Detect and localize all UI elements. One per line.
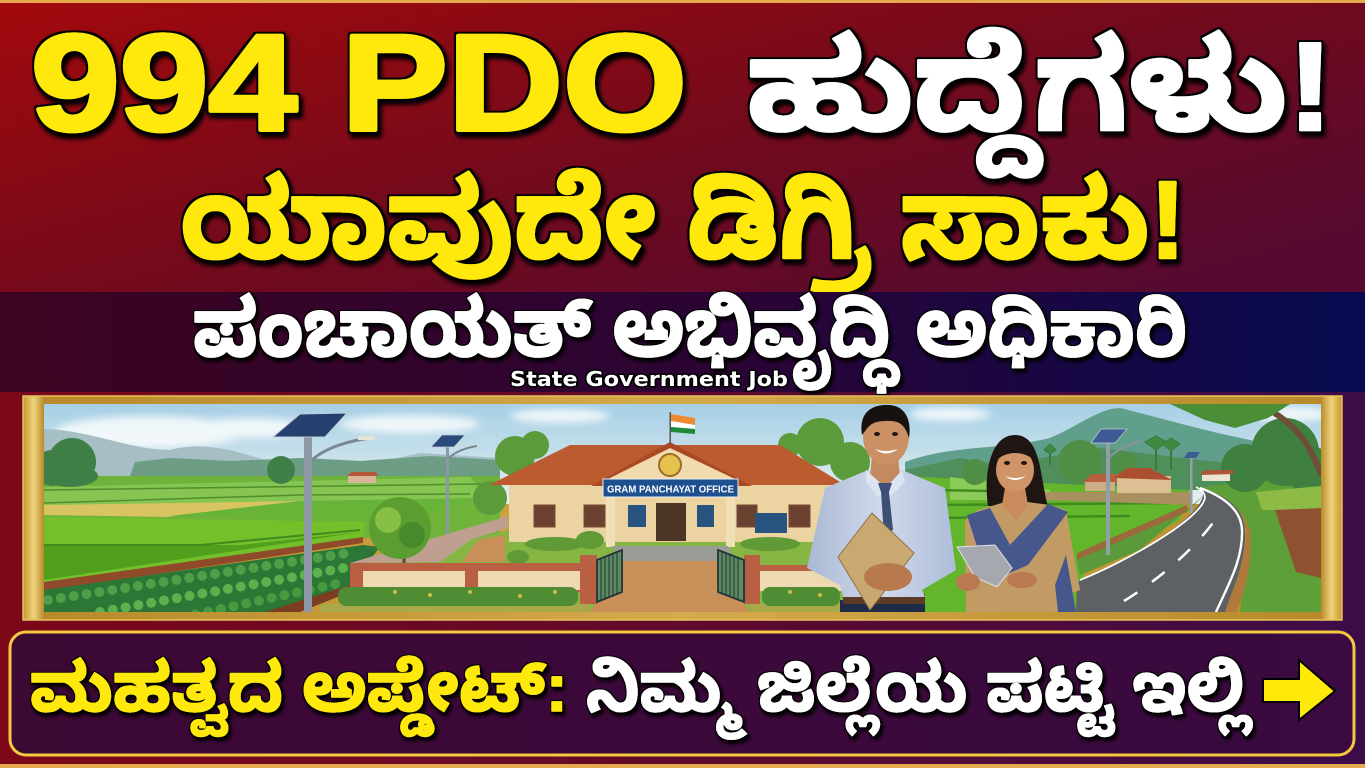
pillars [606,497,735,547]
emblem [659,454,681,476]
big tree top right [1170,404,1321,475]
compound side wall [350,516,508,563]
heading: posts in Kannada: ಹುದ್ದೆಗಳು! [747,16,1333,178]
right gate [718,550,744,602]
title line 1 [31,7,1333,178]
tablet [957,545,1012,587]
subtitle: Panchayat Development Officer: ಪಂಚಾಯತ್ ಅಭಿವೃದ್ಧಿ ಅಧಿಕಾರಿ [193,284,1187,393]
banner text: your district list here: ನಿಮ್ಮ ಜಿಲ್ಲೆಯ ಪಟ್ಟಿ ಇಲ್ಲಿ [586,650,1253,740]
vegetable rows [44,545,380,612]
village house right [1083,468,1172,493]
gold picture frame [23,396,1342,620]
head [863,407,909,465]
palm trees [1044,436,1180,470]
woman [956,435,1080,612]
distant hills left [44,429,500,480]
flag [670,412,695,444]
caption: State Government Job: State Government Job [510,367,788,391]
right fields [900,476,1190,612]
windows [534,505,810,527]
roof [489,445,845,485]
heading: 994 PDO: 994 PDO [31,7,687,160]
subtitle band [0,284,1365,393]
panel: village illustration [34,404,1334,620]
office sign: GRAM PANCHAYAT OFFICE [607,484,734,496]
banner text: important update: ಮಹತ್ವದ ಅಪ್ಡೇಟ್: [30,650,568,737]
clouds [55,406,1330,448]
crop patch [1256,486,1321,510]
door [656,503,686,541]
road [1076,486,1245,612]
road edge lines [1080,487,1205,580]
folder [838,513,914,610]
building: gram panchayat office [489,442,845,561]
dupatta [967,504,1068,575]
tree line [130,456,500,476]
face [1002,488,1028,520]
banner: update strip [10,632,1354,755]
hands [864,563,912,591]
notice boards [628,505,787,533]
hair [987,435,1048,506]
tie [878,483,893,535]
steps [612,546,735,561]
legs [840,600,925,612]
soil strip [44,537,363,591]
verge [1225,505,1250,612]
ploughed soil [1275,508,1321,578]
far house left [346,472,378,483]
shirt [807,470,956,597]
neck [870,455,900,488]
far house by the road [1200,470,1234,481]
solar street light 2 [430,434,478,534]
road centre dashes [1124,520,1215,601]
hands [956,573,980,591]
solar street light 4 [1184,452,1200,513]
grove left [34,438,295,487]
office sign [603,479,738,497]
left gate [597,550,622,602]
man [807,405,956,612]
trees behind building [473,418,870,515]
trees behind village [962,440,1138,485]
compound wall and gate [350,550,870,604]
left fields [44,476,500,540]
title line 2: ಯಾವುದೇ ಡಿಗ್ರಿ ಸಾಕು! [180,159,1186,293]
right roadside greenery [1202,480,1321,612]
salwar top [965,500,1080,612]
front ground and hedges [320,587,840,612]
icon: arrow [1263,660,1335,720]
small garden tree [369,497,431,563]
solar street light 3 [1091,429,1141,555]
field bund along road [1077,505,1187,560]
path and lawn around the building [350,530,850,612]
garden shrubs [507,531,800,564]
solar street light 1 [273,413,375,612]
collar [866,470,905,497]
green mountain right [905,408,1253,470]
sky [44,404,1321,504]
